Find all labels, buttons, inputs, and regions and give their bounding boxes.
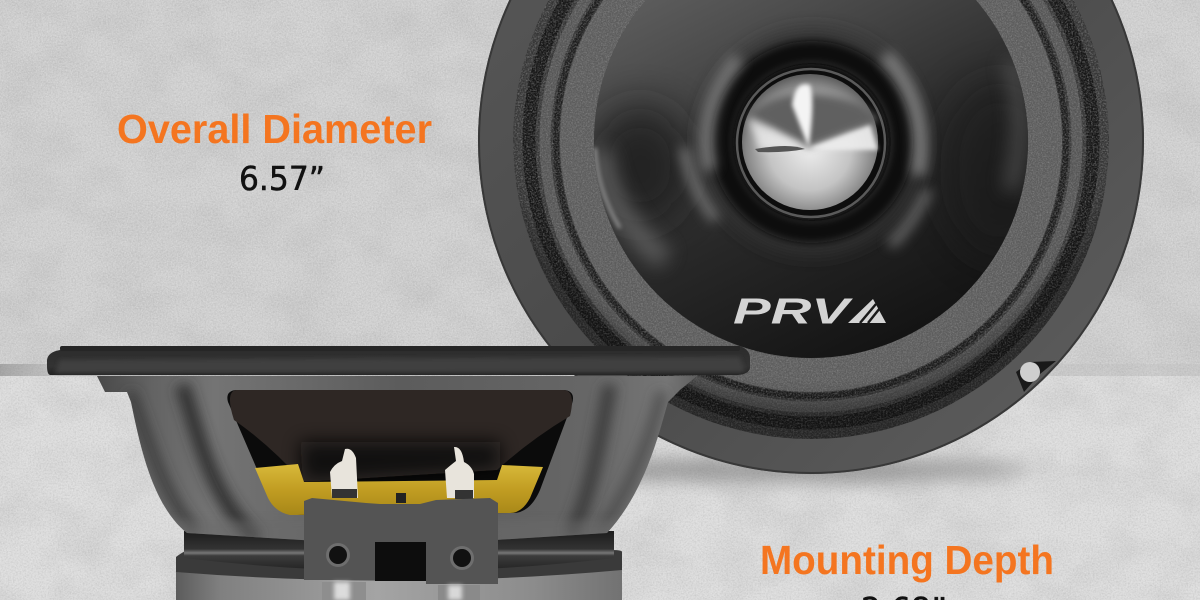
- terminal bolts: [322, 582, 480, 600]
- brand logo: [733, 290, 886, 332]
- terminal block: [304, 498, 498, 584]
- top plate ring: [184, 531, 614, 571]
- flange ring: [478, 0, 1144, 474]
- magnet: [176, 550, 622, 600]
- mounting hole: [1016, 361, 1056, 392]
- cone rear: [230, 390, 572, 482]
- background: concrete wall: [0, 0, 1200, 376]
- spider: [255, 464, 543, 515]
- brand logo: PRV: [733, 290, 854, 332]
- label: mounting depth: [760, 537, 1054, 600]
- lower surround shade: [520, 198, 1103, 439]
- speaker: front view: [478, 0, 1144, 474]
- terminal posts: [330, 447, 474, 503]
- heading: overall diameter: Overall Diameter: [117, 106, 432, 152]
- cone: [594, 0, 1028, 358]
- floor shadow under front speaker: [550, 458, 1030, 482]
- value: 6.57 inches: 6.57”: [239, 159, 325, 198]
- label: overall diameter: [117, 106, 432, 198]
- dust cap: [733, 64, 889, 220]
- surround: [513, 0, 1109, 439]
- basket window: [227, 390, 573, 515]
- heading: mounting depth: Mounting Depth: [760, 537, 1054, 583]
- cone bullet ring: [700, 30, 924, 254]
- basket: [97, 376, 696, 540]
- speaker: side view: [47, 346, 750, 600]
- mounting flange: [47, 346, 750, 375]
- background: concrete floor: [0, 376, 1200, 600]
